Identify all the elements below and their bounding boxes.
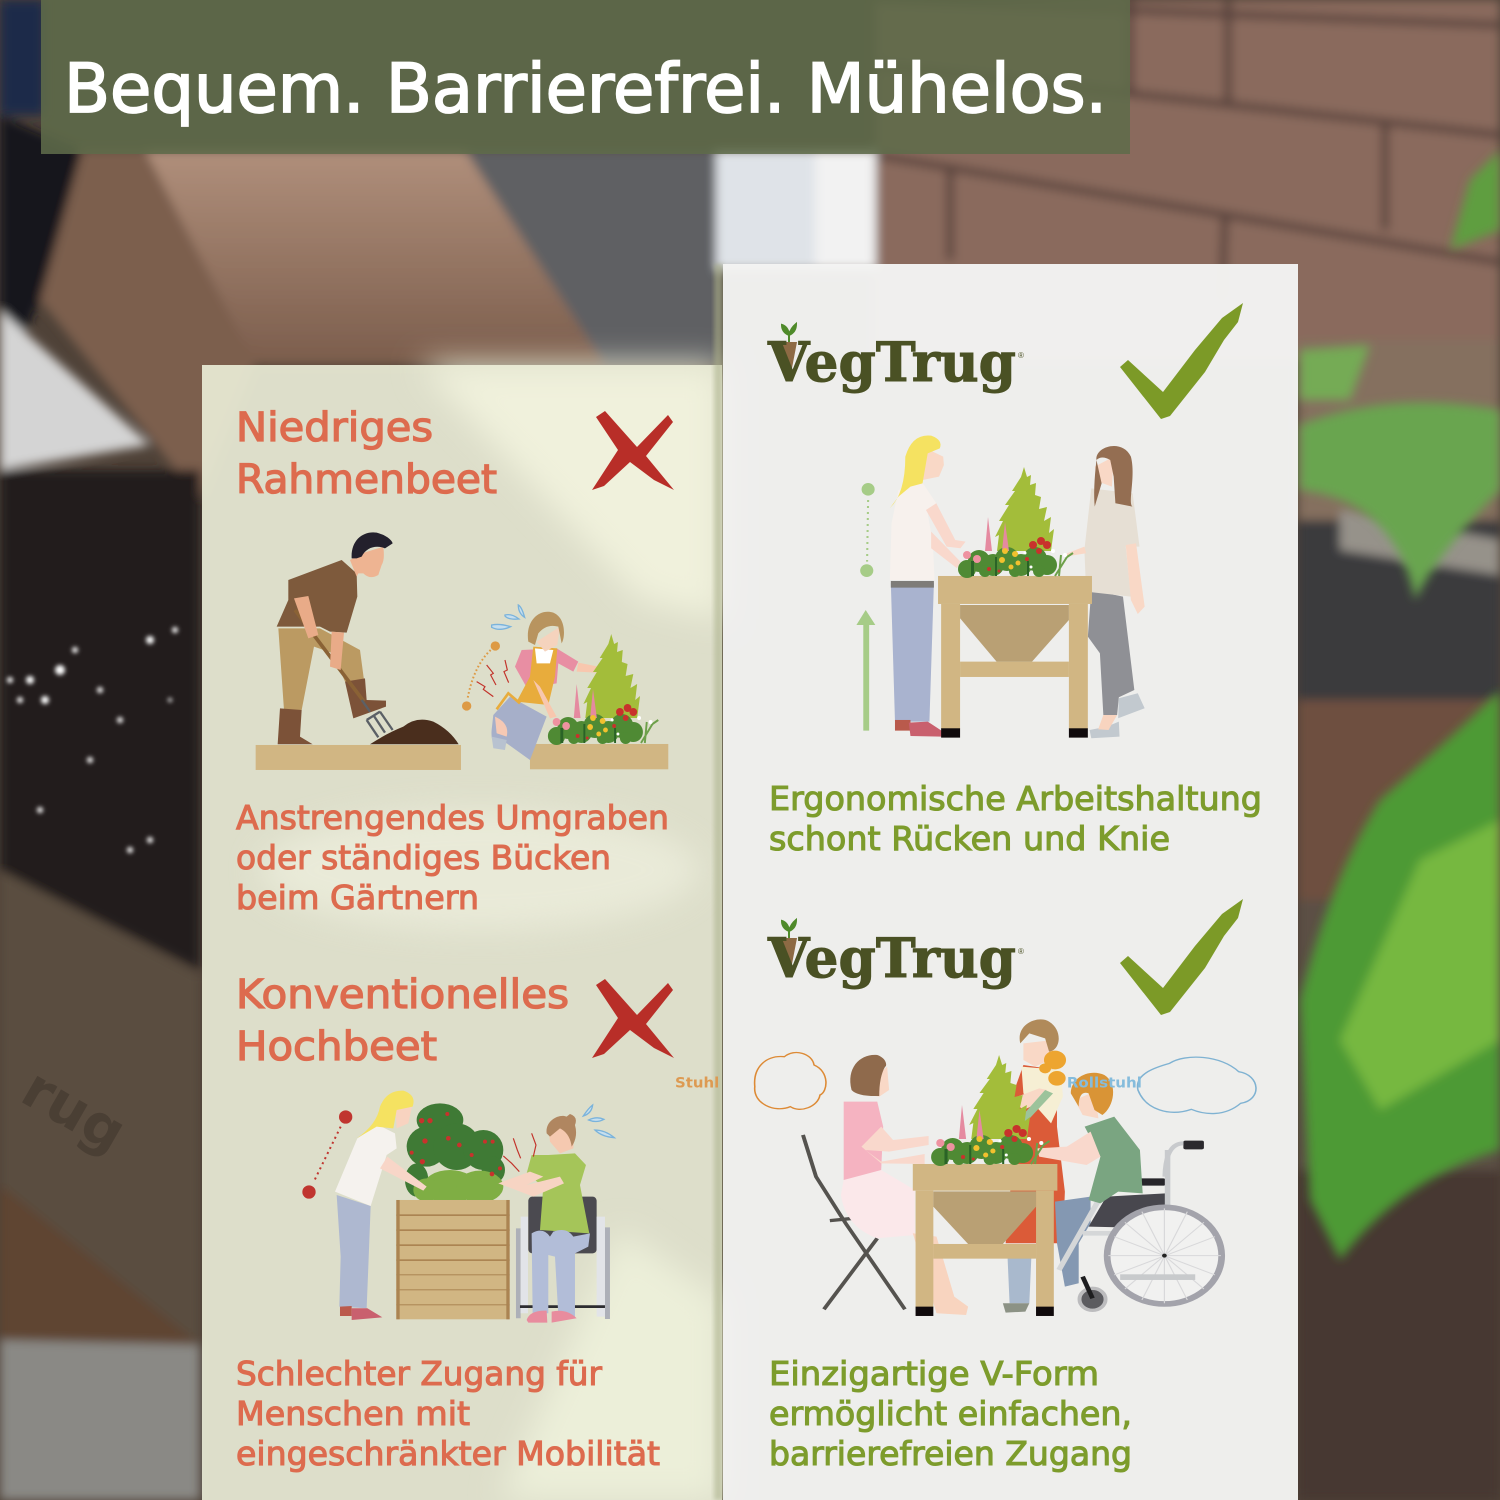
text: low bed: beim Gärtnern <box>236 878 479 917</box>
text: low bed: Anstrengendes Umgraben <box>236 798 669 837</box>
heading: Niedriges Rahmenbeet: Niedriges <box>236 405 433 451</box>
text: conventional raised bed: eingeschränkter Mobilität <box>236 1434 660 1473</box>
plant in VegTrug 1 <box>958 467 1073 578</box>
illustration: conventional raised bed <box>302 1091 614 1323</box>
text: conventional raised bed <box>236 1354 660 1473</box>
foreground leaves <box>1300 150 1500 1260</box>
panel: conventional beds <box>202 365 722 1500</box>
title: Bequem. Barrierefrei. Mühelos. <box>64 50 1107 129</box>
wheelchair cloud <box>1138 1057 1256 1114</box>
icon: red cross 2 <box>592 979 674 1058</box>
text: conventional raised bed: Menschen mit <box>236 1394 470 1433</box>
icon: green check 1 <box>1120 303 1243 419</box>
heading: Konventionelles Hochbeet: Konventionelles <box>236 972 569 1018</box>
heading: Niedriges Rahmenbeet: Rahmenbeet <box>236 457 497 503</box>
text: ergonomic <box>769 779 1262 858</box>
chair cloud with label: Stuhl <box>675 1075 719 1091</box>
wheelchair <box>1055 1197 1091 1287</box>
chair <box>803 1135 905 1309</box>
text: ergonomic: schont Rücken und Knie <box>769 819 1170 858</box>
background photo: rug <box>11 1056 137 1166</box>
illustration: low bed digging and bending <box>256 532 668 770</box>
text: low bed: oder ständiges Bücken <box>236 838 611 877</box>
chair cloud with label <box>675 1053 826 1109</box>
illustration: accessible V-shape with chair and wheelchair <box>675 1019 1256 1316</box>
text: conventional raised bed: Schlechter Zugang für <box>236 1354 602 1393</box>
heading: Konventionelles Hochbeet <box>236 972 569 1070</box>
logo: VegTrug 2 <box>767 920 1024 990</box>
text: accessible <box>769 1354 1132 1473</box>
planter <box>938 576 1092 604</box>
plant in VegTrug 2 <box>931 1055 1050 1166</box>
panel: VegTrug <box>714 264 1298 1500</box>
plant in low bed <box>548 634 658 745</box>
text: ergonomic: Ergonomische Arbeitshaltung <box>769 779 1262 818</box>
text: low bed <box>236 798 669 917</box>
illustration: ergonomic posture at VegTrug <box>856 435 1145 738</box>
text: accessible: ermöglicht einfachen, <box>769 1394 1132 1433</box>
text: accessible: barrierefreien Zugang <box>769 1434 1132 1473</box>
heading: Niedriges Rahmenbeet <box>236 405 497 503</box>
icon: red cross 1 <box>592 411 674 490</box>
icon: green check 2 <box>1120 899 1243 1015</box>
planter <box>913 1164 1057 1191</box>
heading: Konventionelles Hochbeet: Hochbeet <box>236 1024 437 1070</box>
logo: VegTrug 1 <box>767 324 1024 394</box>
florist <box>1008 1258 1031 1303</box>
text: accessible: Einzigartige V-Form <box>769 1354 1099 1393</box>
illustration: accessible V-shape with chair and wheelchair: Rollstuhl <box>1067 1075 1142 1091</box>
header banner <box>41 0 1130 154</box>
wheelchair user <box>1085 1117 1143 1203</box>
